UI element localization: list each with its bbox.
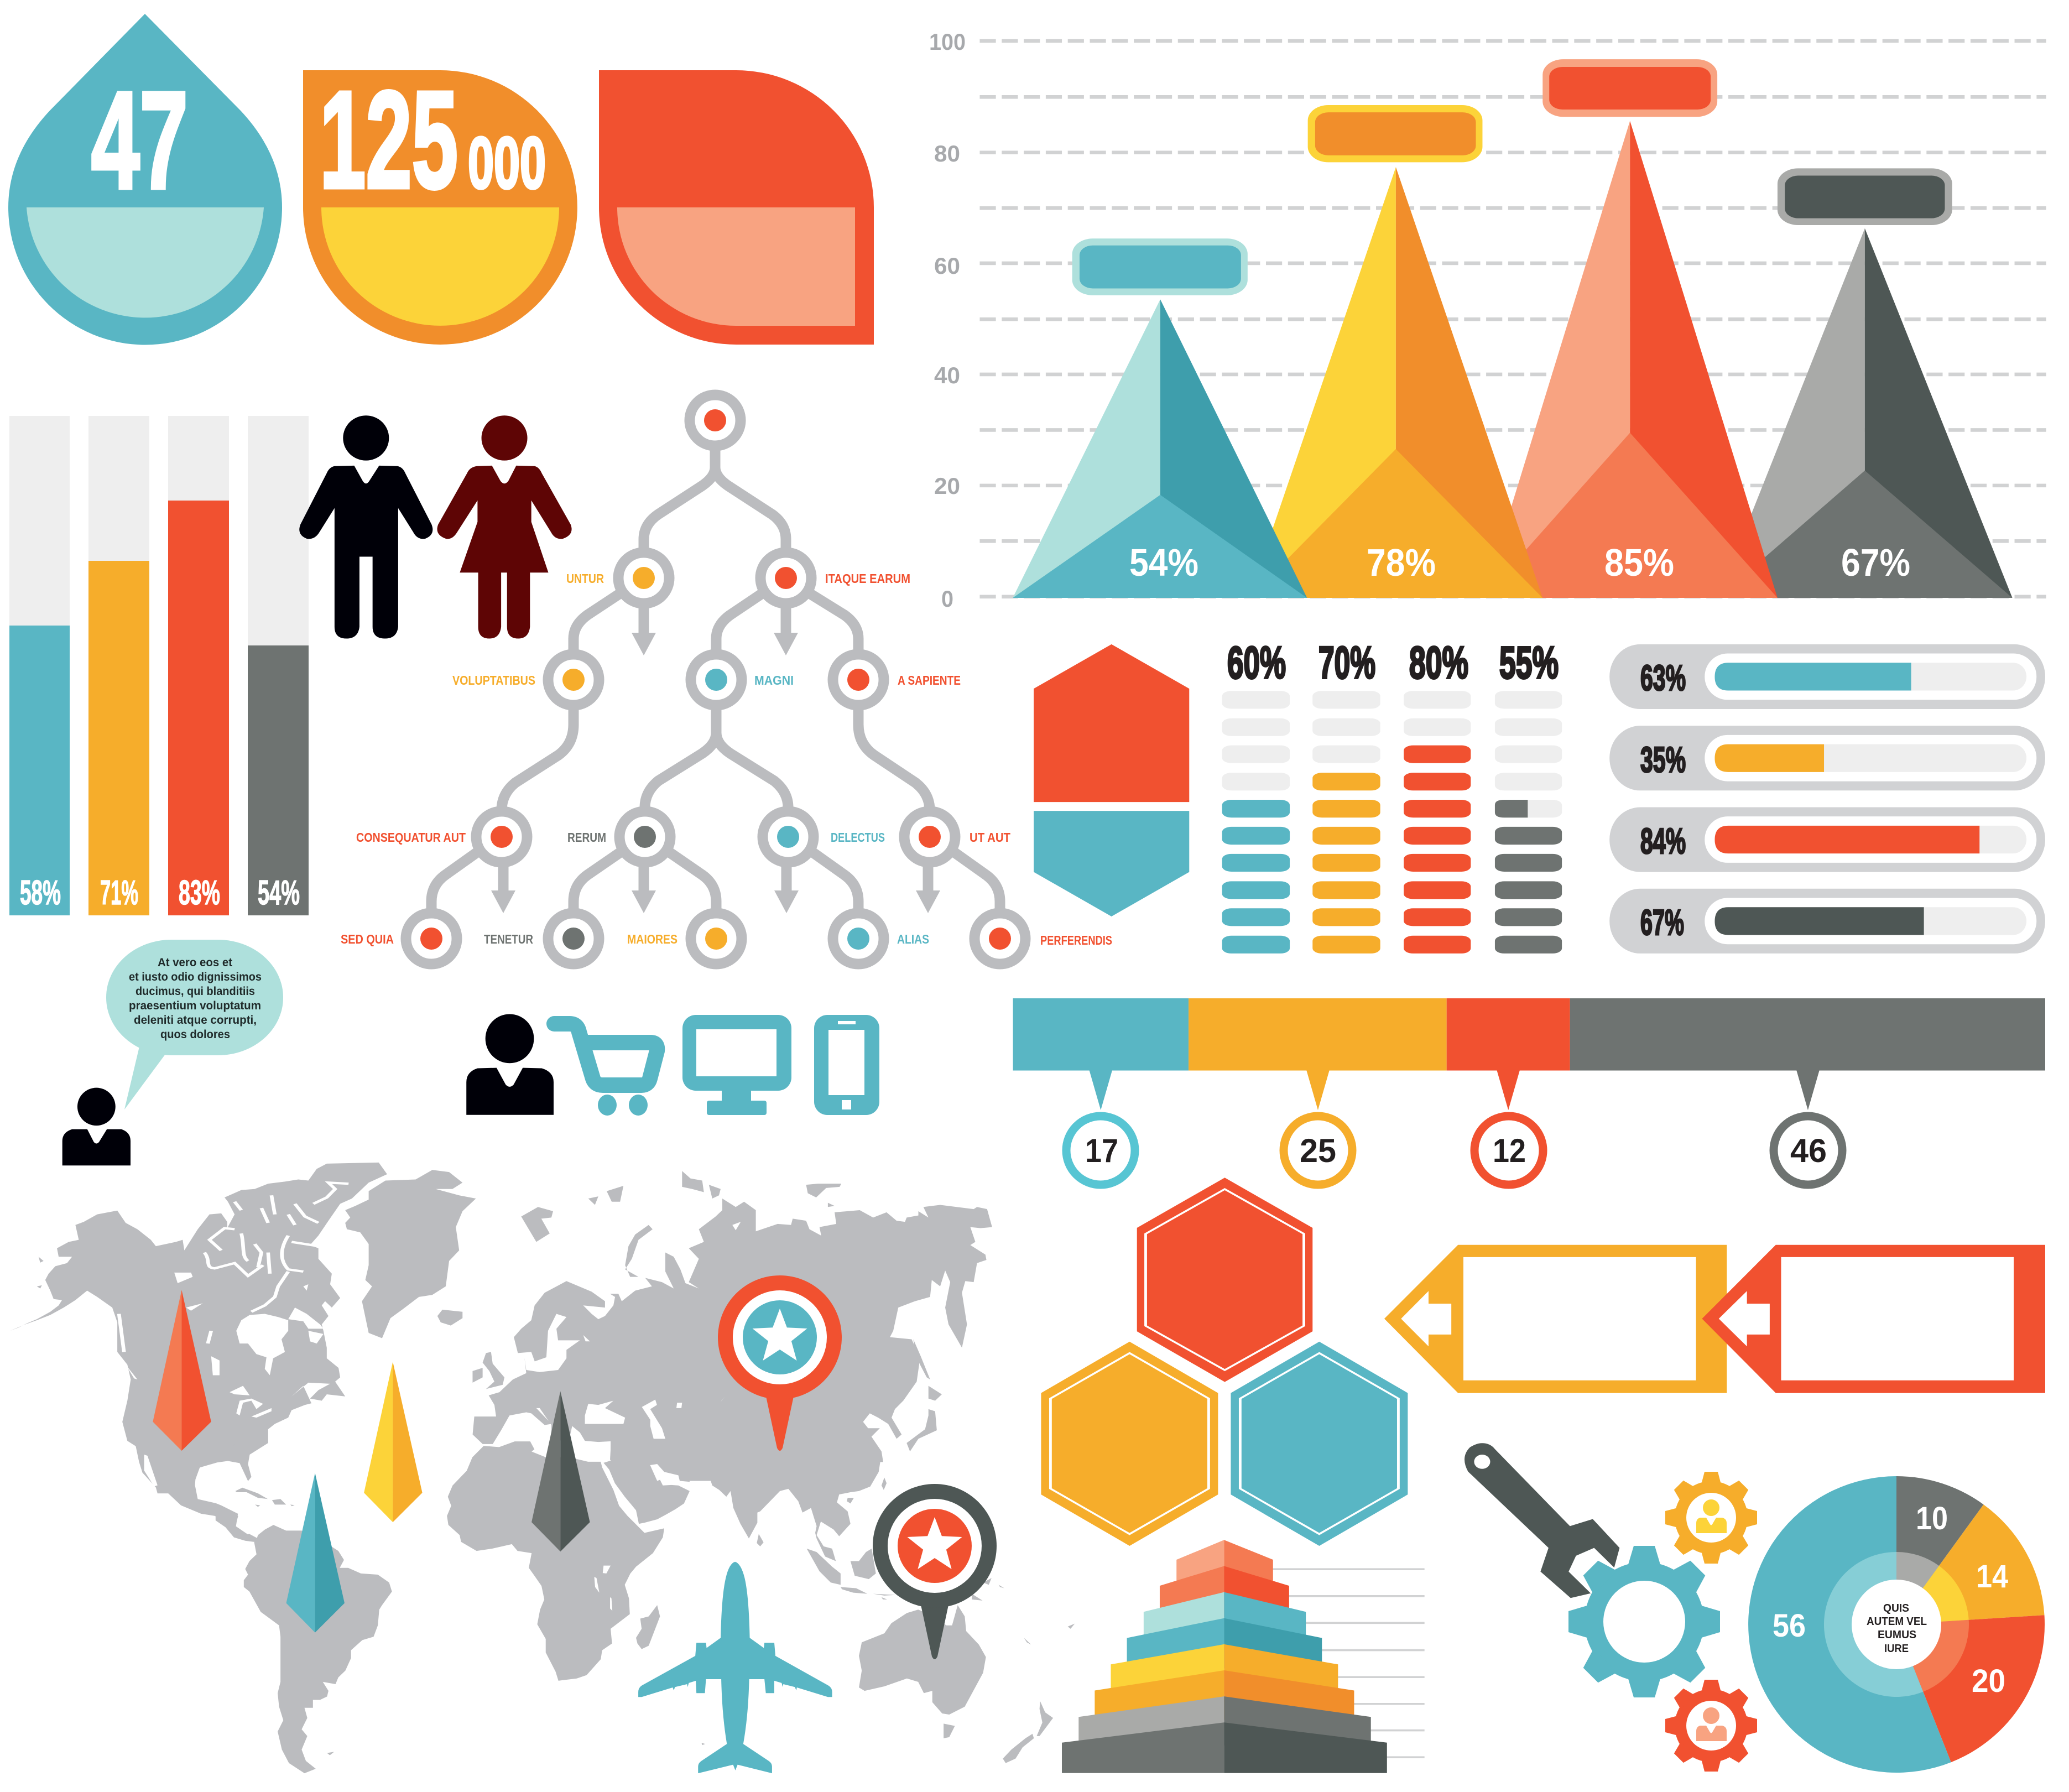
map: african lakes — [594, 1566, 612, 1611]
axis labels — [929, 29, 966, 612]
bar label 58%: 58% — [20, 874, 61, 912]
map: eurasia north — [473, 1171, 992, 1462]
icon: airplane — [638, 1562, 832, 1773]
panel: three hexagons — [1041, 1178, 1408, 1546]
icon: shopping cart — [554, 1024, 657, 1116]
chart: stepped pyramid — [1062, 1540, 1425, 1773]
pill labels: 67% — [1640, 902, 1684, 942]
map: south america, africa, caribbean, madagascar — [216, 1441, 664, 1773]
axis labels: 40 — [934, 362, 960, 388]
pyramid: teal 54 — [1013, 238, 1307, 598]
donut values: 10 — [1916, 1501, 1948, 1536]
icon: small person — [62, 1088, 131, 1165]
callout: speech bubble: praesentium voluptatum — [129, 999, 261, 1012]
column headings: 55% — [1499, 638, 1559, 688]
callout: speech bubble — [106, 940, 283, 1109]
tree labels: VOLUPTATIBUS — [452, 673, 535, 687]
map pin: teal kite — [286, 1473, 345, 1633]
tree labels: ALIAS — [897, 932, 929, 946]
pyramid percent labels: 67% — [1841, 541, 1910, 584]
donut center text: IURE — [1884, 1643, 1909, 1655]
map pin: red star marker — [718, 1275, 842, 1451]
icon: desktop monitor — [682, 1015, 791, 1115]
map: hudson bay, lakes and arctic channels — [126, 1273, 330, 1486]
marker numbers: 46 — [1790, 1132, 1827, 1169]
tree node dots — [420, 409, 1011, 950]
column headings — [1227, 638, 1559, 688]
panel: teal drop 47 — [8, 14, 282, 345]
pyramid percent labels: 78% — [1367, 541, 1436, 584]
chart: pyramid chart — [929, 29, 2046, 612]
map pin: dark kite — [531, 1391, 590, 1551]
icon: red gear with person — [1665, 1680, 1757, 1772]
map pin: yellow kite — [364, 1362, 423, 1522]
chart: horizontal pill progress bars — [1609, 644, 2045, 954]
tree labels: A SAPIENTE — [898, 673, 961, 687]
tree labels: TENETUR — [484, 932, 533, 946]
tree labels: MAIORES — [627, 932, 677, 946]
donut center text — [1867, 1602, 1927, 1655]
pyramid: gray 67 — [1718, 168, 2013, 598]
icon: orange gear with person — [1665, 1472, 1757, 1564]
tree labels: ITAQUE EARUM — [825, 571, 910, 586]
axis labels: 80 — [934, 140, 960, 166]
column headings: 60% — [1227, 638, 1286, 688]
pill labels: 63% — [1640, 658, 1686, 698]
column headings: 70% — [1318, 638, 1375, 688]
donut center text: QUIS — [1883, 1602, 1909, 1614]
pill labels: 35% — [1640, 739, 1686, 780]
donut values: 14 — [1976, 1559, 2008, 1595]
icon: man and woman — [299, 415, 572, 639]
icon: person — [466, 1014, 554, 1115]
map: world map with pins — [10, 1163, 1075, 1773]
tree labels: DELECTUS — [831, 830, 885, 845]
tree labels: RERUM — [567, 830, 606, 845]
donut values: 56 — [1773, 1608, 1806, 1644]
pill labels: 84% — [1640, 821, 1686, 861]
tree labels: SED QUIA — [341, 932, 394, 946]
icon: mobile phone — [814, 1015, 879, 1115]
chart: stacked bar with numbered markers — [1013, 998, 2045, 1185]
number 125: 125 — [320, 62, 458, 217]
pyramid percent labels: 54% — [1129, 541, 1198, 584]
donut values: 20 — [1972, 1663, 2005, 1699]
tree labels: PERFERENDIS — [1040, 933, 1112, 947]
pyramid: orange 78 — [1249, 105, 1542, 598]
donut values — [1773, 1501, 2008, 1699]
bar label 71%: 71% — [100, 874, 138, 912]
map: persian gulf and gulf of oman — [650, 1464, 692, 1491]
chart: vertical progress bars — [9, 416, 309, 915]
icon: large teal gear — [1568, 1546, 1720, 1697]
map: mexico — [155, 1428, 251, 1539]
callout: speech bubble: quos dolores — [160, 1028, 230, 1041]
bar label 83%: 83% — [179, 874, 220, 912]
marker numbers: 25 — [1300, 1132, 1336, 1169]
diagram: branching tree — [341, 395, 1112, 964]
map: south asia, australia, indonesia, new zealand — [603, 1438, 1075, 1763]
tree labels: MAGNI — [754, 673, 794, 687]
callout: speech bubble: et iusto odio dignissimos — [129, 971, 262, 983]
panel: split hexagon — [1034, 644, 1189, 916]
number 000: 000 — [468, 122, 546, 204]
pyramid percent labels: 85% — [1604, 541, 1674, 584]
tree node rings — [406, 395, 1025, 964]
pill labels — [1640, 658, 1686, 942]
marker numbers: 12 — [1493, 1132, 1526, 1169]
panel: red badge — [599, 70, 874, 345]
panel: orange badge 125000 — [303, 62, 577, 345]
map: baltic, black, caspian seas — [524, 1222, 741, 1439]
pyramid: red 85 — [1483, 59, 1778, 598]
callout: speech bubble: At vero eos et — [158, 956, 232, 969]
map pin: dark star marker — [873, 1484, 997, 1659]
bar label 54%: 54% — [258, 874, 300, 912]
axis labels: 60 — [934, 253, 960, 279]
map pin: red kite — [153, 1290, 211, 1451]
axis labels: 20 — [934, 473, 960, 499]
marker numbers — [1085, 1132, 1827, 1169]
tree labels: UNTUR — [566, 571, 604, 586]
icon: wrench — [1465, 1443, 1619, 1598]
callout: speech bubble: ducimus, qui blanditiis — [135, 985, 255, 998]
tree labels: UT AUT — [970, 830, 1010, 845]
chart: segmented level columns — [1222, 638, 1562, 954]
map: north america, greenland, iceland, britain — [10, 1163, 504, 1493]
marker numbers: 17 — [1085, 1132, 1118, 1169]
chart: donut — [1748, 1476, 2045, 1773]
panel: arrow tags — [1384, 1245, 2045, 1393]
axis labels: 0 — [941, 586, 953, 612]
tree labels — [341, 571, 1112, 947]
donut center text: EUMUS — [1878, 1629, 1916, 1641]
axis labels: 100 — [929, 29, 966, 55]
pyramid percent labels — [1129, 541, 1910, 584]
number 47: 47 — [91, 63, 188, 217]
column headings: 80% — [1409, 638, 1468, 688]
donut center text: AUTEM VEL — [1867, 1616, 1927, 1628]
tree labels: CONSEQUATUR AUT — [356, 830, 466, 845]
callout: speech bubble: deleniti atque corrupti, — [134, 1014, 257, 1027]
